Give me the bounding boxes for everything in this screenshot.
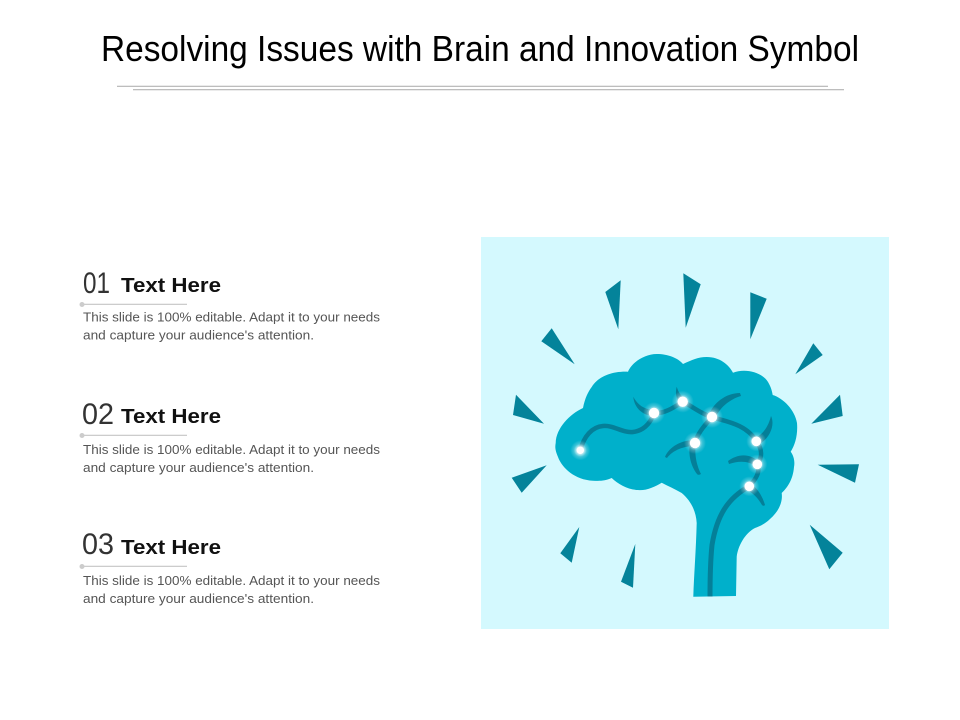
body text 03: This slide is 100% editable. Adapt it to your needs xyxy=(83,573,381,588)
neural pathways xyxy=(580,402,761,596)
body text 02: and capture your audience's attention. xyxy=(83,460,314,475)
body text 01: This slide is 100% editable. Adapt it to your needs xyxy=(83,310,381,324)
divider 01 xyxy=(80,302,187,307)
body text 02: This slide is 100% editable. Adapt it to your needs xyxy=(83,442,381,457)
body text 01: and capture your audience's attention. xyxy=(83,328,314,342)
title: Resolving Issues with Brain and Innovation Symbol xyxy=(101,28,859,69)
divider 03 xyxy=(80,564,187,569)
body text 03 xyxy=(83,573,381,606)
divider 02 xyxy=(80,433,187,438)
panel background xyxy=(481,237,889,629)
list item 03 xyxy=(80,528,381,606)
number 03: 03 xyxy=(82,528,114,561)
body text 03: and capture your audience's attention. xyxy=(83,591,314,606)
heading 03: Text Here xyxy=(121,537,221,559)
tapered nerve branches xyxy=(633,387,772,506)
glowing neuron nodes xyxy=(570,391,767,496)
heading 02: Text Here xyxy=(121,406,221,428)
list item 01 xyxy=(80,267,381,342)
number 01: 01 xyxy=(83,267,110,300)
body text 02 xyxy=(83,442,381,475)
list item 02 xyxy=(80,398,381,475)
panel: brain illustration xyxy=(481,237,889,629)
title underline xyxy=(117,86,844,90)
icon: radiating spark triangles xyxy=(512,273,859,588)
number 02: 02 xyxy=(82,398,114,431)
heading 01: Text Here xyxy=(121,275,221,297)
body text 01 xyxy=(83,310,381,342)
icon: brain silhouette xyxy=(555,354,797,597)
